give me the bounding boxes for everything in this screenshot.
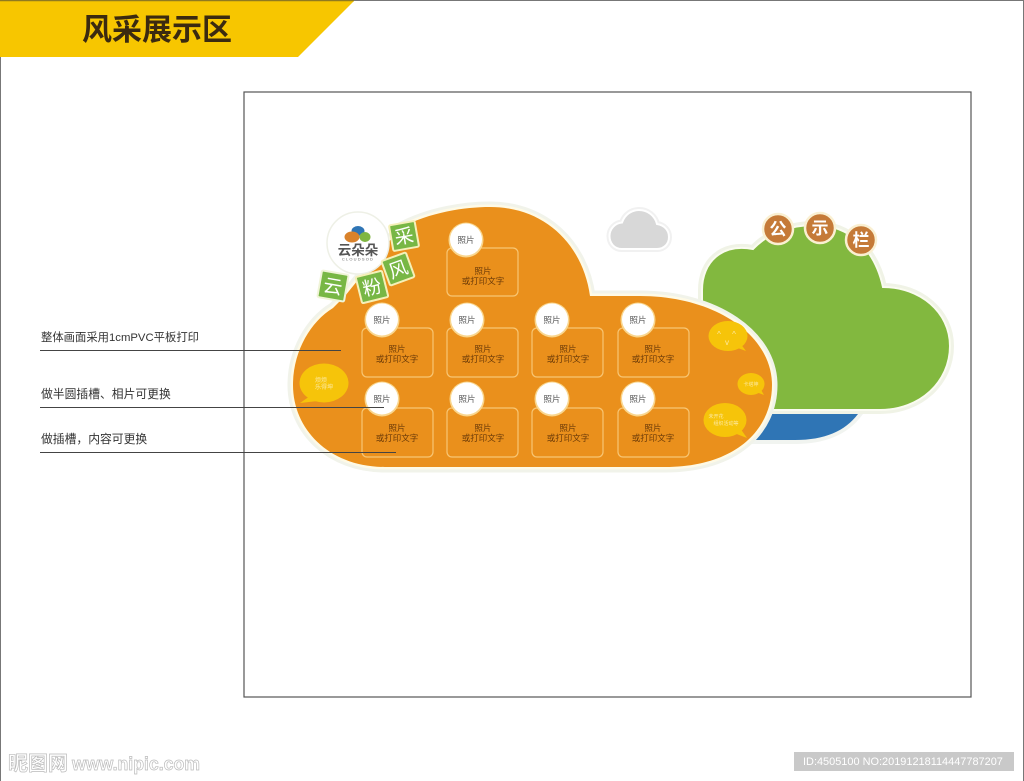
speech bubble: left <box>300 364 348 403</box>
green tile: 云 <box>317 270 349 302</box>
watermark: site name <box>8 753 200 775</box>
green tile: 采 <box>389 221 419 251</box>
speech bubble: large: 组织活动等 <box>713 420 739 427</box>
speech bubble: large: 未开花 <box>708 413 724 420</box>
blue cloud behind <box>740 414 858 440</box>
photo slot: row 1 col 3: 或打印文字 <box>547 354 589 364</box>
photo slot: row 1 col 4: 或打印文字 <box>632 354 674 364</box>
speech bubble: left: 乐得坤 <box>315 383 333 391</box>
photo slot: row 1 col 2: 照片 <box>458 315 476 325</box>
photo slot: row 2 col 1: 照片 <box>373 394 391 404</box>
display frame <box>244 92 971 697</box>
photo slot: row 1 col 1: 照片 <box>388 344 406 354</box>
watermark: site name: 昵图网 <box>8 753 68 775</box>
photo slot: row 2 col 1: 照片 <box>388 423 406 433</box>
notice badge: 栏: 栏 <box>852 231 870 250</box>
notice badge: 示 <box>805 213 835 243</box>
photo slot: row 2 col 4: 照片 <box>629 394 647 404</box>
photo slot: row 1 col 2: 或打印文字 <box>462 354 504 364</box>
photo slot: row 2 col 3 <box>532 382 603 457</box>
photo slot: row 1 col 4: 照片 <box>629 315 647 325</box>
green tile: 风: 风 <box>386 257 411 284</box>
photo slot: top: 照片 <box>474 266 492 276</box>
notice badge: 公: 公 <box>770 220 786 239</box>
green cloud: notice board <box>702 213 950 410</box>
photo slot: row 2 col 4 <box>618 382 689 457</box>
notice badge: 示: 示 <box>812 219 828 238</box>
speech bubble: smiley: v <box>725 338 729 347</box>
logo badge: 云朵朵 <box>338 243 379 258</box>
green tile: 风 <box>381 252 415 286</box>
photo slot: row 2 col 3: 照片 <box>559 423 577 433</box>
photo slot: row 1 col 4 <box>618 302 689 377</box>
notice badge: 栏 <box>846 225 876 255</box>
photo slot: row 2 col 2: 或打印文字 <box>462 433 504 443</box>
annotation: semicircle slot: 做半圆插槽、相片可更换 <box>41 387 171 401</box>
photo slot: row 1 col 1: 或打印文字 <box>376 354 418 364</box>
photo slot: top: 或打印文字 <box>462 276 504 286</box>
photo slot: row 1 col 4: 照片 <box>644 344 662 354</box>
photo slot: row 1 col 3: 照片 <box>543 315 561 325</box>
photo slot: row 2 col 2: 照片 <box>458 394 476 404</box>
photo slot: top <box>447 222 518 296</box>
photo slot: row 2 col 2 <box>447 382 518 457</box>
photo slot: row 1 col 2 <box>447 302 518 377</box>
gray cloud <box>610 210 669 249</box>
photo slot: row 1 col 1: 照片 <box>373 315 391 325</box>
speech bubble: small: 卡塔坤 <box>743 381 759 388</box>
speech bubble: small <box>738 373 764 395</box>
photo slot: row 1 col 3: 照片 <box>559 344 577 354</box>
green tile: 云: 云 <box>322 275 344 299</box>
icon: colored cloud logo <box>344 226 370 242</box>
speech bubble: smiley <box>708 321 748 351</box>
logo badge: CLOUDSOD <box>342 256 374 262</box>
photo slot: row 1 col 1 <box>362 302 433 377</box>
photo slot: row 2 col 4: 或打印文字 <box>632 433 674 443</box>
photo slot: row 2 col 1 <box>362 382 433 457</box>
notice badge: 公 <box>763 214 793 244</box>
speech bubble: smiley: ^ <box>732 330 736 339</box>
orange cloud: main panel <box>293 207 772 467</box>
green tile: 粉 <box>356 271 388 303</box>
watermark: image id <box>794 752 1014 771</box>
annotation: slot: 做插槽，内容可更换 <box>41 432 147 446</box>
speech bubble: large <box>704 403 747 438</box>
photo slot: top: 照片 <box>457 235 475 245</box>
title banner <box>0 1 354 57</box>
watermark: image id: ID:4505100 NO:20191218114447787207 <box>803 756 1003 768</box>
title: 风采展示区 <box>82 14 232 47</box>
speech bubble: left: 烦烦 <box>315 376 327 384</box>
photo slot: row 2 col 3: 或打印文字 <box>547 433 589 443</box>
photo slot: row 2 col 3: 照片 <box>543 394 561 404</box>
photo slot: row 2 col 2: 照片 <box>474 423 492 433</box>
annotation: printing: 整体画面采用1cmPVC平板打印 <box>41 330 199 344</box>
photo slot: row 2 col 4: 照片 <box>644 423 662 433</box>
green tile: 粉: 粉 <box>360 275 384 301</box>
speech bubble: smiley: ^ <box>717 330 721 339</box>
photo slot: row 1 col 2: 照片 <box>474 344 492 354</box>
watermark: site name: www.nipic.com <box>71 754 200 774</box>
photo slot: row 1 col 3 <box>532 302 603 377</box>
logo badge <box>327 212 389 274</box>
green tile: 采: 采 <box>393 225 415 249</box>
photo slot: row 2 col 1: 或打印文字 <box>376 433 418 443</box>
